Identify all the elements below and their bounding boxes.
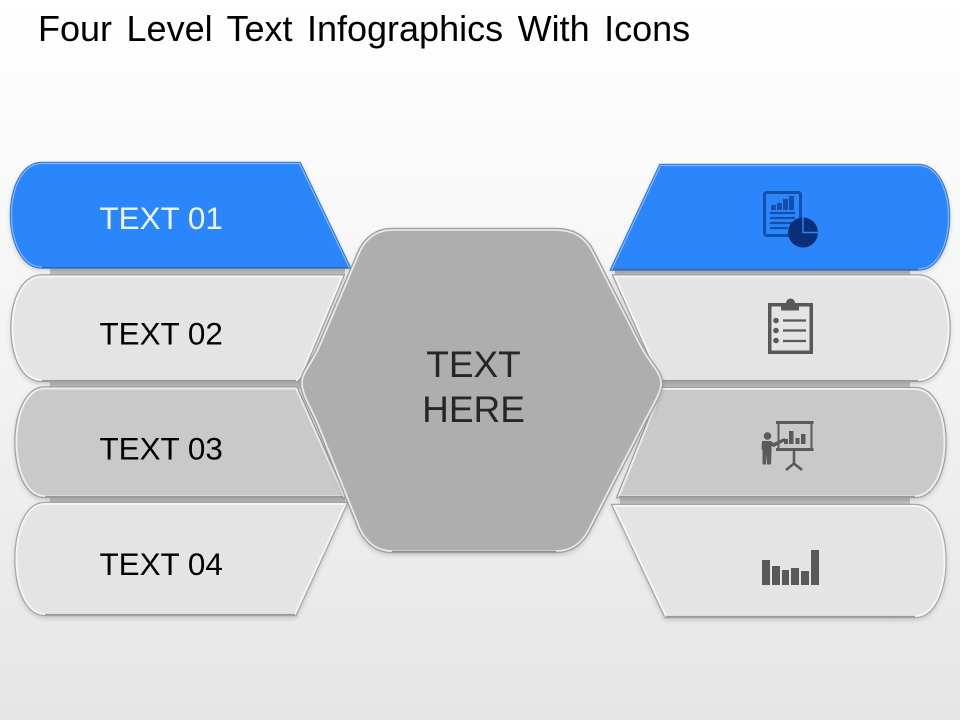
panel: TEXT 04	[16, 504, 346, 614]
label: TEXT HERE: TEXT	[426, 344, 521, 385]
label: TEXT 03: TEXT 03	[100, 432, 223, 466]
title: Four Level Text Infographics With Icons	[38, 8, 690, 49]
panel: icon 1	[612, 166, 948, 270]
label: TEXT HERE: HERE	[422, 389, 525, 430]
icon: clipboard checklist	[768, 298, 813, 354]
icon: presenter with chart	[762, 421, 814, 470]
icon: report with pie chart	[764, 192, 818, 248]
label: TEXT 01: TEXT 01	[100, 201, 223, 236]
panel: icon 2	[615, 276, 948, 380]
panel: central hexagon	[302, 230, 661, 552]
panel: icon 4	[614, 506, 944, 616]
panel: TEXT 01	[12, 164, 349, 268]
panel: icon 3	[619, 389, 944, 496]
icon: bar chart	[762, 550, 819, 585]
panel: TEXT 03	[16, 388, 344, 496]
panel: TEXT 02	[12, 276, 342, 380]
label: TEXT 02: TEXT 02	[100, 316, 223, 352]
label: TEXT 04: TEXT 04	[100, 547, 223, 582]
